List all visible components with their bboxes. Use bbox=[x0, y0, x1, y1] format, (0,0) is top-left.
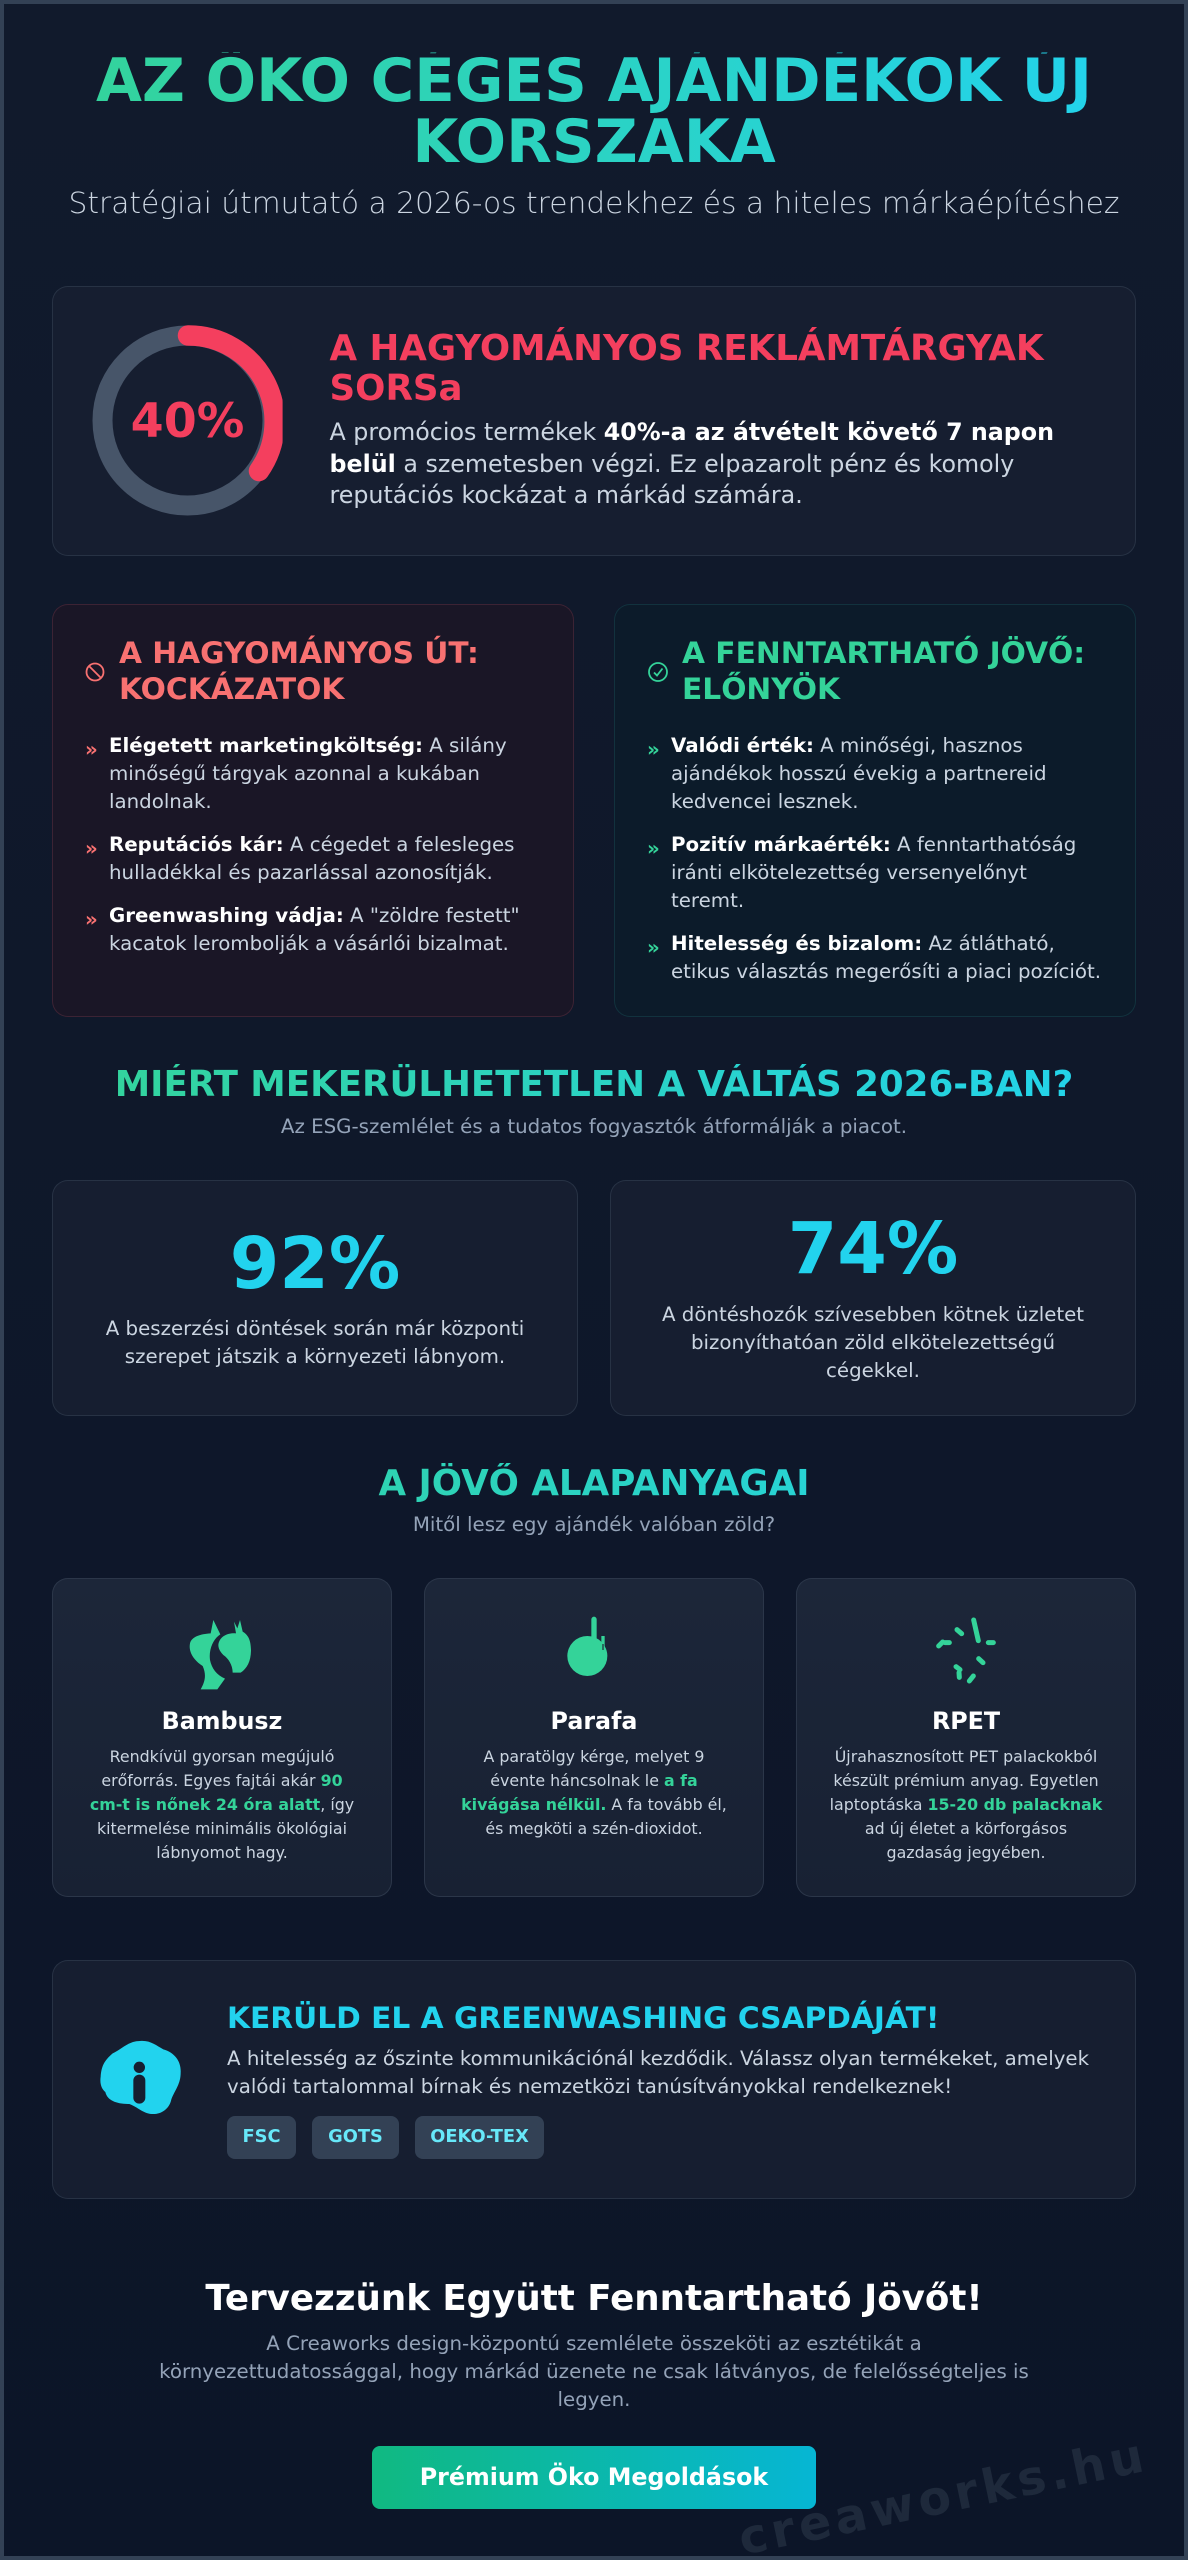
benefit item: real value: kedvencei lesznek. bbox=[671, 790, 859, 813]
panel: 40% hero bbox=[52, 286, 1136, 556]
benefit item: trust bbox=[647, 932, 1101, 983]
icon: prohibited bbox=[86, 662, 104, 682]
benefit item: brand value bbox=[647, 833, 1076, 912]
card: cork: A paratölgy kérge, melyet 9 bbox=[484, 1747, 704, 1766]
benefit item: trust: Hitelesség és bizalom: Az átlátható, bbox=[671, 932, 1055, 955]
risk item: greenwashing: » bbox=[85, 908, 98, 931]
benefit item: real value: » bbox=[647, 738, 660, 761]
section heading: why the switch bbox=[115, 1064, 1073, 1138]
card: rPET: RPET bbox=[932, 1707, 1000, 1735]
benefit item: trust: » bbox=[647, 936, 660, 959]
risk item: marketing cost: Elégetett marketingköltség: A silány bbox=[109, 734, 507, 757]
card: bamboo: Rendkívül gyorsan megújuló bbox=[110, 1747, 334, 1766]
card: cork bbox=[424, 1578, 764, 1897]
chart: 40 percent ring: 40% bbox=[131, 394, 244, 449]
benefit item: real value: Valódi érték: A minőségi, hasznos bbox=[671, 734, 1023, 757]
card: rPET: gazdaság jegyében. bbox=[887, 1843, 1045, 1862]
badge: OEKO-TEX bbox=[415, 2116, 544, 2159]
benefits heading: ELŐNYÖK bbox=[682, 672, 840, 707]
card: rPET: készült prémium anyag. Egyetlen bbox=[833, 1771, 1099, 1790]
benefit item: brand value: teremt. bbox=[671, 889, 744, 912]
card: rPET: laptoptáska 15-20 db palacknak bbox=[830, 1795, 1102, 1814]
card: rPET: Újrahasznosított PET palackokból bbox=[835, 1747, 1097, 1766]
hero body text: belül a szemetesben végzi. Ez elpazarolt pénz és komoly bbox=[330, 450, 1014, 478]
panel: traditional risks bbox=[52, 604, 574, 1017]
title: KORSZAKA bbox=[412, 108, 776, 177]
risks heading: A HAGYOMÁNYOS ÚT: bbox=[119, 636, 479, 671]
subtitle: Stratégiai útmutató a 2026-os trendekhez és a hiteles márkaépítéshez bbox=[69, 186, 1119, 221]
benefits heading bbox=[682, 636, 1085, 707]
risk item: greenwashing: kacatok lerombolják a vásárlói bizalmat. bbox=[109, 932, 509, 955]
risk item: reputation bbox=[85, 833, 514, 884]
risks heading bbox=[119, 636, 479, 707]
icon: cork bbox=[567, 1616, 608, 1676]
hero body text: reputációs kockázat a márkád számára. bbox=[330, 481, 803, 509]
stat card: 74%: bizonyíthatóan zöld elkötelezettségű bbox=[691, 1331, 1055, 1354]
stat card: 74%: cégekkel. bbox=[826, 1359, 920, 1382]
panel: greenwashing warning bbox=[52, 1960, 1136, 2199]
risk item: reputation: Reputációs kár: A cégedet a felesleges bbox=[109, 833, 514, 856]
title bbox=[96, 52, 1086, 163]
cta heading: Tervezzünk Együtt Fenntartható Jövőt! bbox=[205, 2278, 983, 2319]
card: cork: Parafa bbox=[551, 1707, 637, 1735]
badge: FSC bbox=[227, 2116, 296, 2159]
cta button: Prémium Öko Megoldások bbox=[420, 2463, 768, 2491]
badge: GOTS bbox=[312, 2116, 399, 2159]
card: bamboo: Bambusz bbox=[162, 1707, 282, 1735]
stat card: 74% bbox=[610, 1180, 1136, 1416]
card: bamboo: lábnyomot hagy. bbox=[156, 1843, 288, 1862]
chart: 40 percent ring bbox=[92, 325, 283, 516]
stat card: 92%: A beszerzési döntések során már központi bbox=[106, 1317, 524, 1340]
section heading: materials: A JÖVŐ ALAPANYAGAI bbox=[379, 1463, 809, 1504]
hero heading bbox=[330, 327, 1044, 409]
card: bamboo: cm-t is nőnek 24 óra alatt, így bbox=[90, 1795, 354, 1814]
benefit item: real value bbox=[647, 734, 1047, 813]
card: rPET bbox=[796, 1578, 1136, 1897]
cta text: környezettudatossággal, hogy márkád üzenete ne csak látványos, de felelősségteljes is bbox=[159, 2360, 1029, 2383]
card: bamboo bbox=[52, 1578, 392, 1897]
risk item: reputation: » bbox=[85, 837, 98, 860]
hero heading: SORSa bbox=[330, 368, 463, 409]
badge: FSC: FSC bbox=[242, 2126, 281, 2147]
risks heading: KOCKÁZATOK bbox=[119, 672, 344, 707]
benefits heading: A FENNTARTHATÓ JÖVŐ: bbox=[682, 636, 1085, 671]
benefit item: brand value: » bbox=[647, 837, 660, 860]
risk item: marketing cost: » bbox=[85, 738, 98, 761]
panel: sustainable benefits bbox=[614, 604, 1136, 1017]
icon: rpet bbox=[936, 1618, 996, 1684]
icon: check circle bbox=[648, 662, 668, 682]
cta text bbox=[159, 2332, 1029, 2411]
risk item: marketing cost: minőségű tárgyak azonnal a kukában bbox=[109, 762, 480, 785]
hero body text bbox=[330, 418, 1054, 509]
badge: OEKO-TEX: OEKO-TEX bbox=[430, 2126, 529, 2147]
cta text: A Creaworks design-központú szemlélete összeköti az esztétikát a bbox=[266, 2332, 922, 2355]
card: cork: évente háncsolnak le a fa bbox=[490, 1771, 698, 1790]
card: cork: kivágása nélkül. A fa tovább él, bbox=[461, 1795, 727, 1814]
stat card: 74%: A döntéshozók szívesebben kötnek üzletet bbox=[662, 1303, 1084, 1326]
warning body bbox=[227, 2047, 1089, 2098]
title: AZ ÖKO CÉGES AJÁNDÉKOK ÚJ bbox=[96, 47, 1092, 116]
stat card: 92% bbox=[52, 1180, 578, 1416]
benefit item: real value: ajándékok hosszú évekig a partnereid bbox=[671, 762, 1047, 785]
card: cork: és megköti a szén-dioxidot. bbox=[485, 1819, 703, 1838]
cta text: legyen. bbox=[558, 2388, 630, 2411]
risk item: marketing cost: landolnak. bbox=[109, 790, 212, 813]
benefit item: brand value: iránti elkötelezettség versenyelőnyt bbox=[671, 861, 1027, 884]
stat card: 92%: szerepet játszik a környezeti lábnyom. bbox=[125, 1345, 505, 1368]
section heading: materials bbox=[378, 1463, 809, 1536]
header bbox=[69, 52, 1119, 221]
icon: bamboo bbox=[190, 1620, 251, 1690]
warning body: A hitelesség az őszinte kommunikációnál kezdődik. Válassz olyan termékeket, amelyek bbox=[227, 2047, 1089, 2070]
hero body text: A promócios termékek 40%-a az átvételt követő 7 napon bbox=[330, 418, 1054, 446]
warning heading: KERÜLD EL A GREENWASHING CSAPDÁJÁT! bbox=[227, 2001, 939, 2036]
section heading: why the switch: MIÉRT MEKERÜLHETETLEN A VÁLTÁS 2026-BAN? bbox=[115, 1064, 1073, 1105]
risk item: marketing cost bbox=[85, 734, 507, 813]
icon: info cloud bbox=[100, 2040, 181, 2114]
stat card: 74%: 74% bbox=[788, 1207, 958, 1290]
hero heading: A HAGYOMÁNYOS REKLÁMTÁRGYAK bbox=[330, 328, 1044, 369]
stat card: 92%: 92% bbox=[230, 1222, 400, 1305]
risk item: reputation: hulladékkal és pazarlással azonosítják. bbox=[109, 861, 493, 884]
badge: GOTS: GOTS bbox=[328, 2126, 383, 2147]
call to action bbox=[159, 2278, 1029, 2509]
section heading: why the switch: Az ESG-szemlélet és a tudatos fogyasztók átformálják a piacot. bbox=[281, 1115, 907, 1138]
risk item: greenwashing: Greenwashing vádja: A "zöldre festett" bbox=[109, 904, 520, 927]
warning body: valódi tartalommal bírnak és nemzetközi tanúsítványokkal rendelkeznek! bbox=[227, 2075, 952, 2098]
card: bamboo: erőforrás. Egyes fajtái akár 90 bbox=[101, 1771, 343, 1790]
benefit item: brand value: Pozitív márkaérték: A fenntarthatóság bbox=[671, 833, 1076, 856]
cta button bbox=[372, 2446, 816, 2509]
benefit item: trust: etikus választás megerősíti a piaci pozíciót. bbox=[671, 960, 1101, 983]
risk item: greenwashing bbox=[85, 904, 520, 955]
section heading: materials: Mitől lesz egy ajándék valóban zöld? bbox=[413, 1513, 775, 1536]
card: bamboo: kitermelése minimális ökológiai bbox=[97, 1819, 347, 1838]
card: rPET: ad új életet a körforgásos bbox=[865, 1819, 1067, 1838]
